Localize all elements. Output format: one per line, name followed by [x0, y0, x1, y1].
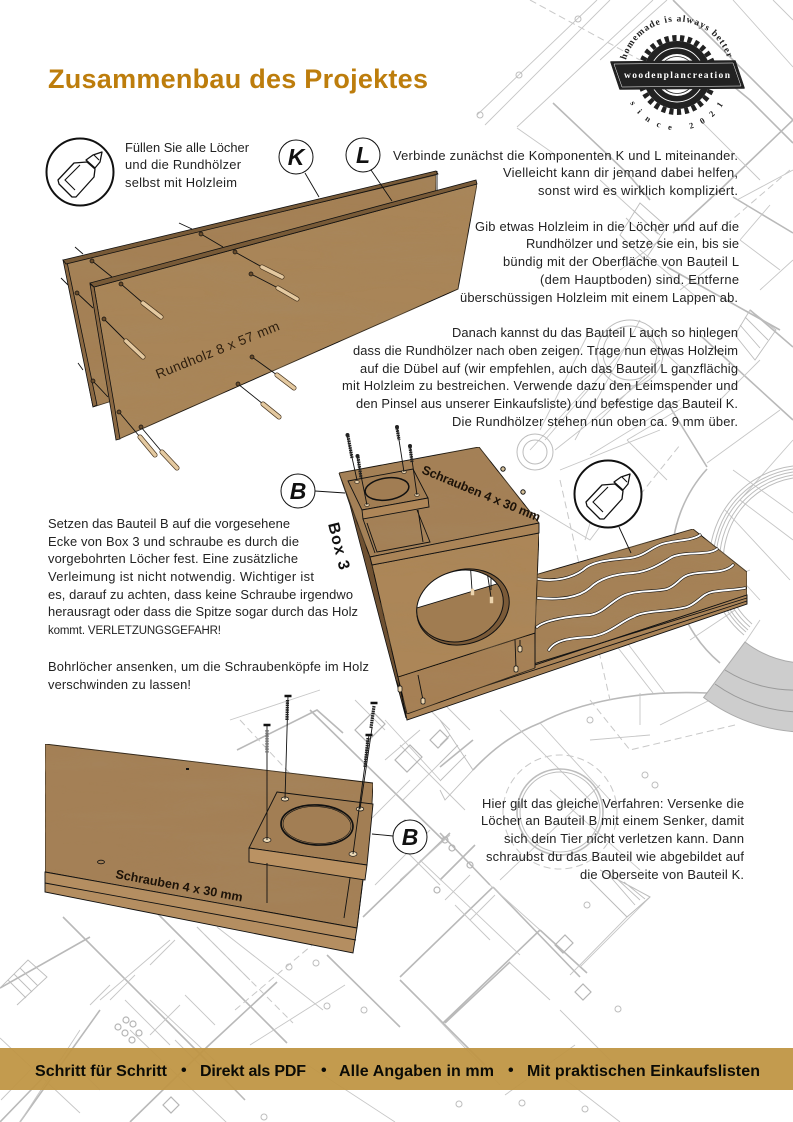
label B upper: B — [290, 478, 306, 504]
label L — [346, 138, 392, 201]
icon: glue bottle on plate — [574, 460, 642, 553]
part B plate — [249, 792, 373, 928]
saw blade — [640, 38, 714, 112]
illustration: boards K and L with dowels — [61, 171, 477, 468]
logo slogan: homemade is always better — [620, 15, 732, 60]
text: step one instructions: (dem Hauptboden) sind. Entferne — [540, 272, 739, 287]
footer text: • — [508, 1062, 514, 1079]
text: step one instructions: dass die Rundhölzer nach oben zeigen. Trage nun etwas Holzleim — [353, 343, 738, 358]
logo: woodenplancreation saw blade — [610, 15, 745, 130]
text: part B instructions: Verleimung ist nicht notwendig. Wichtiger ist — [48, 569, 314, 584]
bottom board front layers — [45, 872, 357, 953]
text: final step instructions: Löcher an Bauteil B mit einem Senker, damit — [481, 813, 744, 828]
title: Zusammenbau des Projektes — [48, 64, 428, 94]
footer text: • — [321, 1062, 327, 1079]
stair hatching — [0, 203, 776, 1005]
text: part B instructions: Setzen das Bauteil B auf die vorgesehene — [48, 516, 290, 531]
text: step one instructions: Verbinde zunächst die Komponenten K und L miteinander. — [393, 148, 738, 163]
footer text: Direkt als PDF — [200, 1063, 306, 1080]
box lower base — [398, 633, 535, 714]
illustration: bottom board with part B — [45, 696, 378, 953]
box side — [339, 473, 406, 718]
text: step one instructions: auf die Dübel auf (wir empfehlen, auch das Bauteil L ganzflächig — [360, 361, 738, 376]
lower dowel tips and edges — [396, 633, 535, 704]
text: final step instructions: die Oberseite von Bauteil K. — [580, 867, 744, 882]
footer text: • — [181, 1062, 187, 1079]
box front face — [372, 533, 539, 677]
label: screws on board: Schrauben 4 x 30 mm — [114, 867, 244, 904]
text: part B instructions: kommt. VERLETZUNGSGEFAHR! — [48, 625, 221, 637]
label K: K — [288, 144, 306, 170]
label B lower: B — [402, 824, 418, 850]
text: step one instructions: bündig mit der Oberfläche von Bauteil L — [503, 254, 739, 269]
text: step one instructions: überschüssigen Holzleim mit einem Lappen ab. — [460, 290, 738, 305]
text: part B instructions — [48, 516, 369, 692]
part B on top of box — [348, 469, 430, 553]
footer banner — [0, 1048, 793, 1090]
text: glue note: selbst mit Holzleim — [125, 175, 237, 190]
text: step one instructions: sonst wird es wirklich kompliziert. — [538, 183, 738, 198]
board K — [61, 171, 438, 407]
label B upper — [281, 474, 345, 508]
text: step one instructions: den Pinsel aus unserer Einkaufsliste) und befestige das Bauteil K. — [356, 396, 738, 411]
footer text: Schritt für Schritt — [35, 1063, 168, 1080]
label L: L — [356, 142, 370, 168]
text: part B instructions: herausragt oder dass die Spitze sogar durch das Holz — [48, 604, 358, 619]
text: part B instructions: Ecke von Box 3 und schraube es durch die — [48, 534, 299, 549]
label B lower — [372, 820, 427, 854]
text: step one instructions — [342, 148, 739, 429]
text: step one instructions: Gib etwas Holzleim in die Löcher und auf die — [475, 219, 739, 234]
label K — [279, 140, 319, 197]
label: dowel size: Rundholz 8 x 57 mm — [154, 318, 282, 382]
text: glue note: Füllen Sie alle Löcher — [125, 140, 250, 155]
text: final step instructions: schraubst du das Bauteil wie abgebildet auf — [486, 849, 744, 864]
board L — [90, 180, 477, 440]
text: part B instructions: es, darauf zu achten, dass keine Schraube irgendwo — [48, 587, 353, 602]
logo since: since 2021 — [630, 102, 723, 130]
box top — [339, 447, 539, 557]
text: step one instructions: Die Rundhölzer stehen nun oben ca. 9 mm über. — [452, 414, 738, 429]
text: part B instructions: verschwinden zu lassen! — [48, 677, 191, 692]
footer text: Alle Angaben in mm — [339, 1063, 494, 1080]
bottom board top face — [45, 744, 373, 928]
label: box 3: Box 3 — [324, 521, 352, 572]
footer text — [35, 1062, 760, 1080]
footer text: Mit praktischen Einkaufslisten — [527, 1063, 760, 1080]
text: step one instructions: mit Holzleim zu bestreichen. Verwende dazu den Leimspender und — [342, 378, 738, 393]
screws on bottom board — [264, 696, 378, 854]
label: screws on box: Schrauben 4 x 30 mm — [420, 463, 543, 524]
text: step one instructions: Vielleicht kann dir jemand dabei helfen, — [503, 165, 738, 180]
text: step one instructions: Danach kannst du das Bauteil L auch so hinlegen — [452, 325, 738, 340]
logo name: woodenplancreation — [624, 71, 731, 81]
dowels — [102, 250, 297, 468]
text: final step instructions: Hier gilt das gleiche Verfahren: Versenke die — [482, 796, 744, 811]
text: part B instructions: Bohrlöcher ansenken, um die Schraubenköpfe im Holz — [48, 659, 369, 674]
illustration: box 3 on glued base plate — [324, 425, 747, 720]
text: final step instructions: sich dein Tier nicht verletzen kann. Dann — [504, 831, 744, 846]
screws on box — [346, 425, 417, 505]
text: glue note — [125, 140, 250, 190]
logo banner — [611, 61, 744, 89]
icon: glue bottle top — [46, 138, 114, 206]
back dots — [501, 467, 525, 494]
text: part B instructions: vorgebohrten Löcher fest. Eine zusätzliche — [48, 551, 298, 566]
base plate with glue lines — [398, 529, 747, 720]
text: step one instructions: Rundhölzer und setze sie ein, bis sie — [526, 236, 739, 251]
box round opening — [416, 568, 510, 646]
gray hatched ring sector — [704, 642, 793, 732]
text: glue note: und die Rundhölzer — [125, 157, 242, 172]
text: final step instructions — [481, 796, 744, 882]
